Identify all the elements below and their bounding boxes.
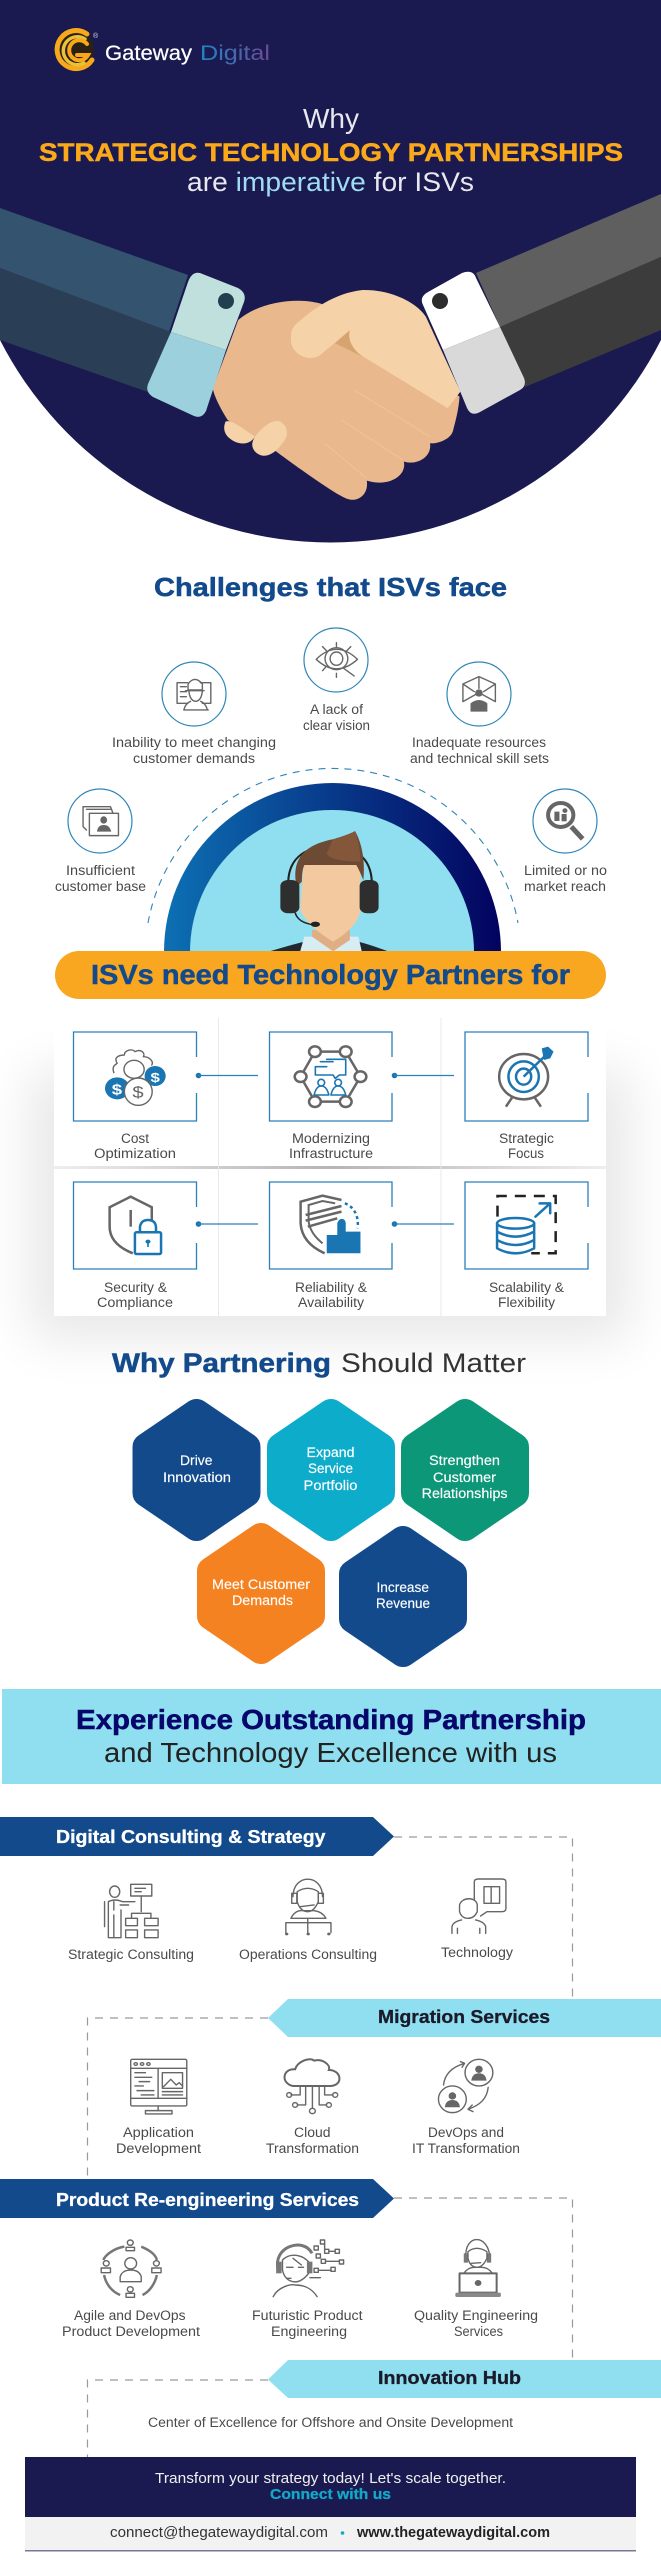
- icon: security: [110, 1197, 161, 1254]
- label: Engineering: [271, 2324, 347, 2339]
- label: A lack of: [310, 702, 363, 717]
- label: [112, 735, 276, 766]
- label: [414, 2308, 538, 2339]
- arrow heading: [0, 1817, 394, 1856]
- label: Agile and DevOps: [74, 2308, 186, 2323]
- section: migration services: [116, 1999, 661, 2156]
- hero background: [0, 0, 661, 542]
- hexagon: drive innovation: Drive: [180, 1453, 212, 1468]
- icon: cost: $: [112, 1081, 123, 1098]
- label: Inadequate resources: [412, 735, 546, 750]
- right cuff: [422, 272, 525, 414]
- icon: logo swirl: [56, 31, 94, 69]
- hexagon: strengthen customer relationships: Customer: [433, 1470, 497, 1485]
- hexagon: strengthen customer relationships: Relationships: [422, 1486, 508, 1501]
- icon: operations consulting: [285, 1879, 331, 1935]
- heading: why partnering: Why Partnering: [112, 1348, 331, 1378]
- label: Insufficient: [66, 863, 135, 878]
- hexagon: strengthen customer relationships: Strengthen: [429, 1453, 500, 1468]
- arch: [164, 783, 501, 952]
- icon: cost: [105, 1050, 166, 1105]
- hexagon: meet customer demands: Meet Customer: [212, 1577, 311, 1592]
- call to action: Connect with us: [270, 2486, 391, 2503]
- hexagon: strengthen customer relationships: [415, 1413, 515, 1527]
- text block: Center of Excellence for Offshore and Onsite Development: [148, 2415, 513, 2430]
- banner: experience: and Technology Excellence with us: [104, 1737, 557, 1768]
- labels: Compliance: [97, 1295, 173, 1310]
- contact bar: www.thegatewaydigital.com: [356, 2525, 550, 2541]
- section: digital consulting: [0, 1817, 513, 1962]
- label: Operations Consulting: [239, 1947, 377, 1962]
- challenge: clear vision: [303, 628, 370, 733]
- banner: technology partners: ISVs need Technology Partners for: [91, 959, 570, 990]
- labels: Availability: [298, 1295, 364, 1310]
- hexagon: drive innovation: Innovation: [163, 1470, 231, 1485]
- right sleeve: [476, 194, 661, 387]
- section: innovation hub: [148, 2360, 661, 2430]
- label: Cloud: [294, 2125, 330, 2140]
- arrow heading: Migration Services: [378, 2007, 550, 2027]
- agent: [270, 831, 388, 951]
- hands: [213, 290, 460, 500]
- label: [116, 2125, 201, 2156]
- icon: modernizing: [295, 1046, 366, 1107]
- label: [412, 2125, 520, 2156]
- icon: eye: [304, 628, 368, 692]
- label: Limited or no: [524, 863, 607, 878]
- hexagon: increase revenue: Increase: [376, 1580, 429, 1595]
- label: Inability to meet changing: [112, 735, 276, 750]
- labels: Focus: [508, 1146, 544, 1161]
- contact bar: [25, 2517, 636, 2552]
- icon: worker: [162, 662, 226, 726]
- label: Transformation: [266, 2141, 359, 2156]
- labels: Cost: [121, 1131, 149, 1146]
- labels: Flexibility: [498, 1295, 555, 1310]
- left sleeve: [0, 208, 188, 392]
- label: Futuristic Product: [252, 2308, 363, 2323]
- label: market reach: [524, 879, 606, 894]
- banner: experience: [2, 1689, 661, 1784]
- hexagon: expand service portfolio: Portfolio: [304, 1478, 358, 1493]
- hexagons: [146, 1413, 515, 1653]
- labels: Scalability &: [489, 1280, 564, 1295]
- icon: devops: [438, 2059, 493, 2113]
- label: Development: [116, 2141, 201, 2156]
- label: Application: [123, 2125, 194, 2140]
- section: product re-engineering: [0, 2179, 538, 2339]
- label: [55, 863, 146, 894]
- cards: [54, 1018, 606, 1316]
- call to action: Transform your strategy today! Let's scale together.: [155, 2470, 506, 2487]
- icon: quality engineering: [455, 2240, 501, 2297]
- icon: reliability: [301, 1196, 360, 1253]
- hexagon: meet customer demands: [211, 1537, 311, 1650]
- icon: target: [499, 1047, 554, 1107]
- hexagon: expand service portfolio: Expand: [306, 1445, 354, 1460]
- labels: Optimization: [94, 1146, 176, 1161]
- challenge: changing demands: [112, 662, 276, 766]
- title: are imperative for ISVs: [187, 167, 474, 197]
- challenge: customer base: [55, 789, 146, 894]
- heading: why partnering: Should Matter: [341, 1348, 526, 1378]
- logo wordmark: ®: [93, 32, 99, 40]
- title: [39, 103, 623, 197]
- label: and technical skill sets: [410, 751, 549, 766]
- banner: experience: Experience Outstanding Partnership: [76, 1704, 586, 1735]
- label: Product Development: [62, 2324, 200, 2339]
- panel: hero: [0, 0, 661, 542]
- labels: Modernizing: [292, 1131, 370, 1146]
- icon: futuristic: [273, 2240, 344, 2297]
- footer: [25, 2457, 636, 2552]
- hexagon: drive innovation: [146, 1413, 246, 1527]
- panel: partner needs grid: [30, 1018, 630, 1340]
- label: [252, 2308, 363, 2339]
- icon: profile folders: [68, 789, 132, 853]
- hexagon: expand service portfolio: [281, 1413, 381, 1527]
- left cuff: [147, 273, 245, 417]
- label: customer base: [55, 879, 146, 894]
- logo: [56, 31, 270, 69]
- label: [266, 2125, 359, 2156]
- hexagon: expand service portfolio: Service: [308, 1461, 353, 1476]
- label: [303, 702, 370, 733]
- frames and connectors: [74, 1032, 588, 1269]
- illustration: agent in arch: [164, 783, 501, 952]
- labels: [94, 1131, 564, 1310]
- icon: agile: [101, 2240, 161, 2297]
- illustration: handshake: [0, 194, 661, 500]
- heading: why partnering: [112, 1348, 526, 1378]
- icon: cost: $: [151, 1071, 160, 1086]
- arrow heading: Innovation Hub: [378, 2368, 521, 2388]
- contact bar: connect@thegatewaydigital.com: [110, 2525, 328, 2541]
- labels: Reliability &: [295, 1280, 367, 1295]
- arrow heading: [268, 1999, 661, 2037]
- label: [62, 2308, 200, 2339]
- icon: network person: [447, 662, 511, 726]
- label: customer demands: [133, 751, 255, 766]
- banner: technology partners: [55, 951, 606, 999]
- label: Services: [454, 2324, 503, 2339]
- arrow heading: [0, 2179, 394, 2218]
- challenge: resources: [410, 662, 549, 766]
- icon: strategic consulting: [105, 1884, 158, 1938]
- challenge: market reach: [524, 789, 607, 894]
- label: Strategic Consulting: [68, 1947, 194, 1962]
- call to action: [25, 2457, 636, 2517]
- hexagon: meet customer demands: Demands: [232, 1593, 293, 1608]
- label: [524, 863, 607, 894]
- hexagon: increase revenue: [353, 1540, 453, 1653]
- icon: cloud transformation: [285, 2059, 339, 2114]
- arrow heading: Product Re-engineering Services: [56, 2190, 359, 2210]
- hexagon: increase revenue: Revenue: [376, 1596, 430, 1611]
- icon: cost: $: [132, 1082, 144, 1101]
- labels: Infrastructure: [289, 1146, 373, 1161]
- title: STRATEGIC TECHNOLOGY PARTNERSHIPS: [39, 139, 623, 167]
- label: DevOps and: [428, 2125, 504, 2140]
- arrow heading: [268, 2360, 661, 2398]
- logo wordmark: Digital: [200, 42, 270, 65]
- logo wordmark: Gateway: [105, 42, 193, 65]
- heading: challenges: Challenges that ISVs face: [154, 572, 507, 602]
- arrow heading: Digital Consulting & Strategy: [56, 1827, 326, 1847]
- icon: technology: [452, 1879, 506, 1933]
- title: Why: [303, 103, 359, 134]
- icon: magnifier: [533, 789, 597, 853]
- label: IT Transformation: [412, 2141, 520, 2156]
- soft shadow: [30, 1070, 630, 1340]
- labels: Strategic: [499, 1131, 554, 1146]
- label: Quality Engineering: [414, 2308, 538, 2323]
- label: [410, 735, 549, 766]
- labels: Security &: [104, 1280, 167, 1295]
- dashed arc: [148, 768, 518, 923]
- logo wordmark: [93, 32, 270, 65]
- label: clear vision: [303, 718, 370, 733]
- label: Technology: [441, 1945, 513, 1960]
- dashed connectors: [88, 1837, 572, 2457]
- icon: application development: [131, 2059, 187, 2114]
- icon: scalability: [497, 1196, 556, 1253]
